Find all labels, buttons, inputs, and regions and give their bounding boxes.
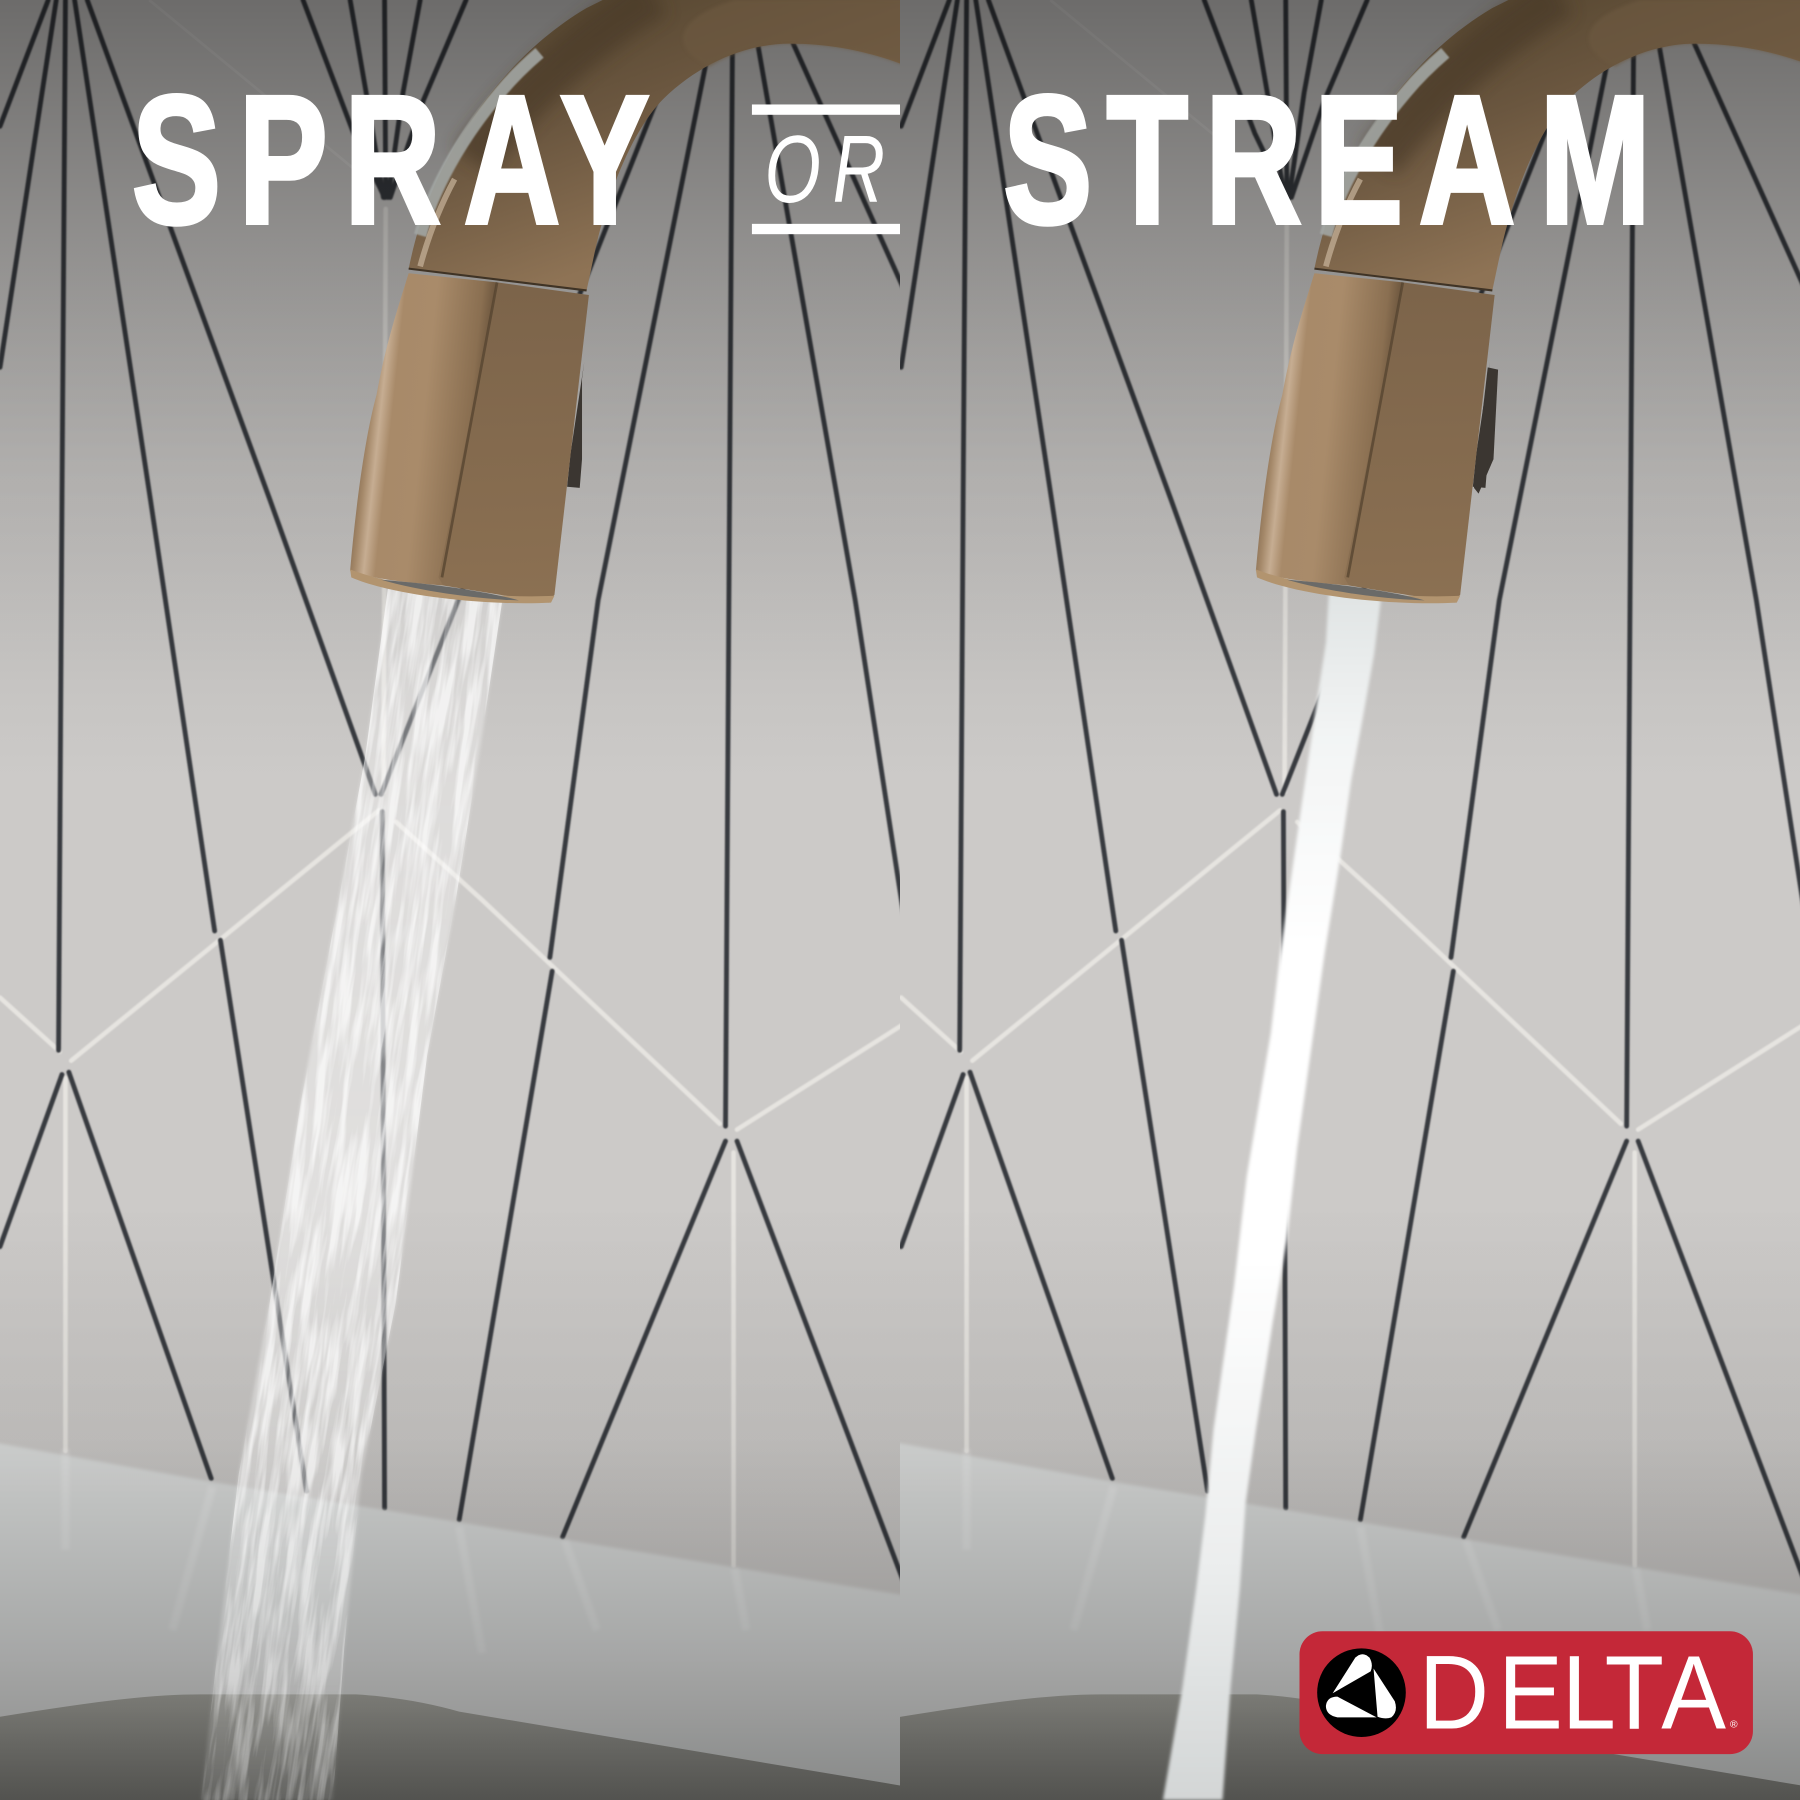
logo: Delta xyxy=(1299,1631,1753,1754)
tile wall, counter and sink background xyxy=(867,0,1800,1800)
spray water xyxy=(201,588,502,1800)
tile wall, counter and sink background xyxy=(0,0,941,1800)
title: SPRAY: SPRAY xyxy=(132,57,649,262)
panel: spray side xyxy=(0,0,941,1800)
divider: OR: OR xyxy=(765,115,885,222)
faucet head: spray mode xyxy=(350,0,918,603)
panel: stream side xyxy=(867,0,1800,1800)
stream water xyxy=(1163,584,1381,1800)
title: STREAM: STREAM xyxy=(1003,57,1651,262)
icon: Delta tri-drop symbol xyxy=(1317,1648,1406,1737)
registered mark: ® xyxy=(1730,1720,1738,1731)
wordmark: DELTA xyxy=(1419,1635,1727,1751)
faucet head: stream mode xyxy=(1256,0,1800,603)
divider: OR xyxy=(752,104,900,234)
